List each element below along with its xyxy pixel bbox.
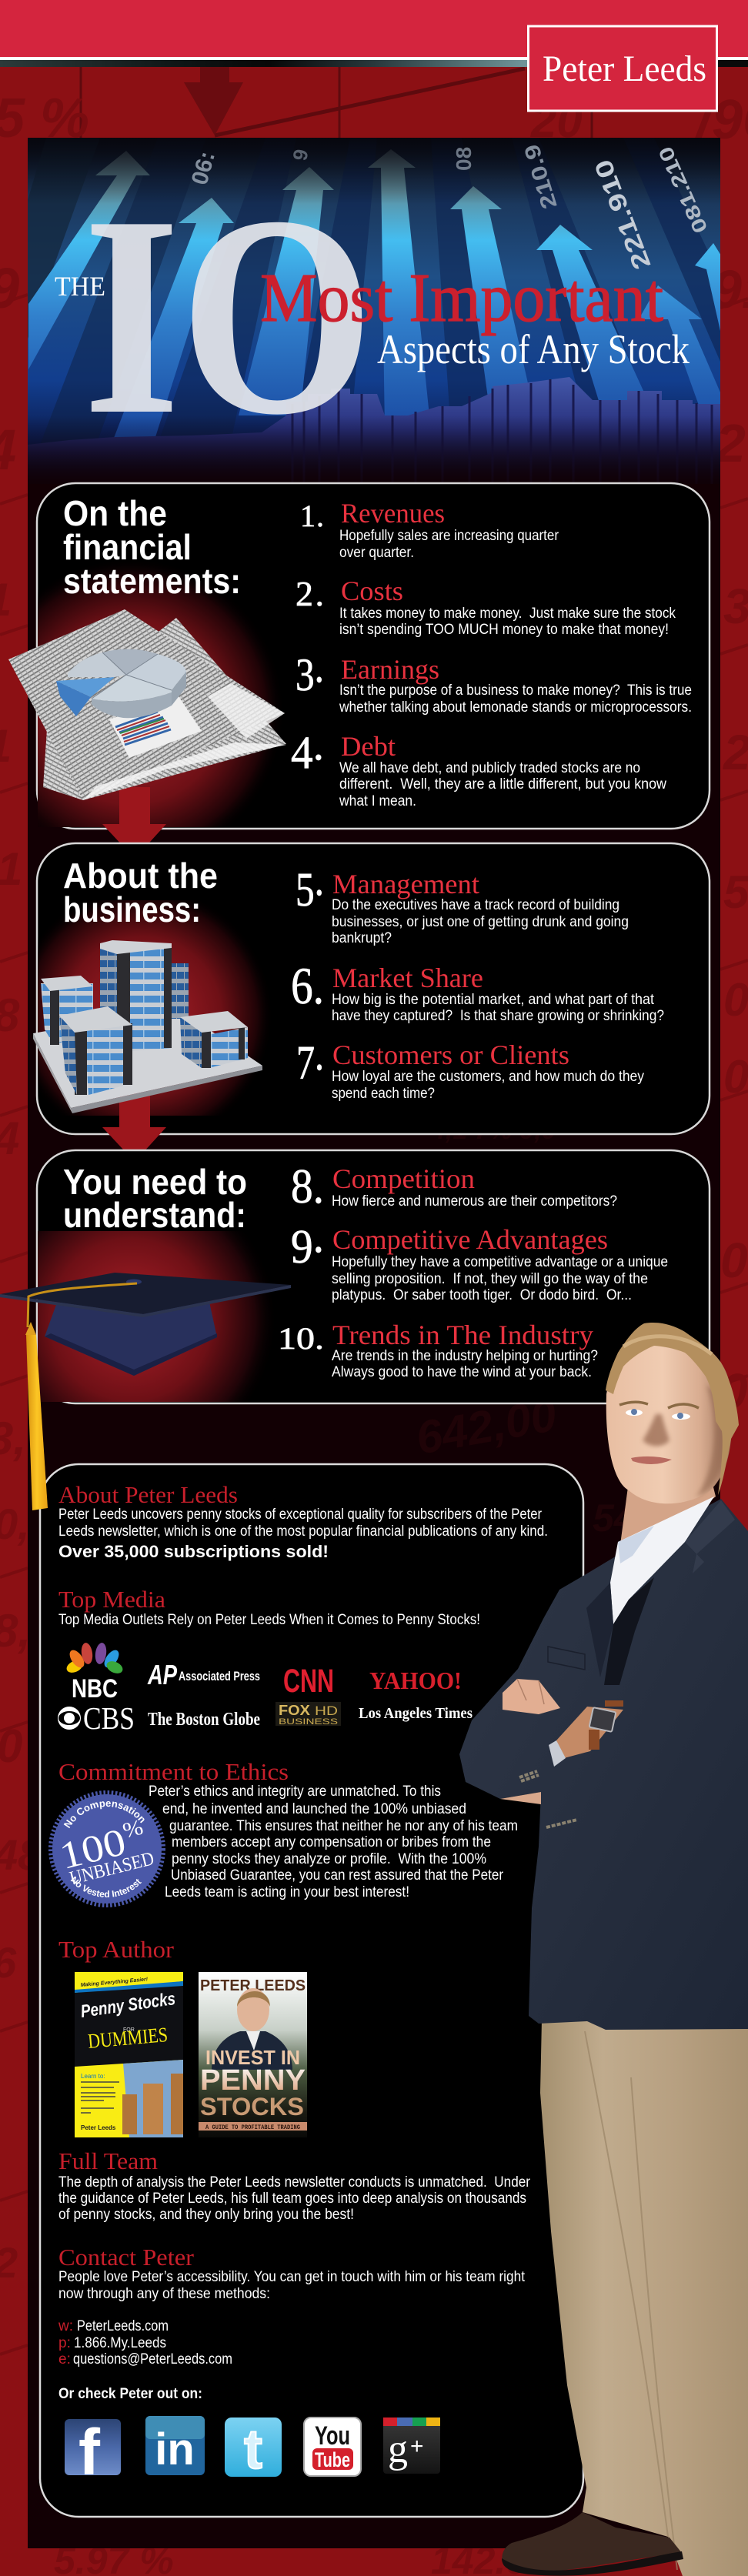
- rear tower: [165, 963, 189, 1019]
- item 7: customers or clients: How loyal are the customers, and how much do they: [332, 1069, 644, 1085]
- logo: Peter Leeds: Peter Leeds: [543, 48, 706, 89]
- section: commitment to ethics: [58, 1758, 518, 1900]
- item 1: revenues: Revenues: [341, 498, 445, 529]
- logo: Yahoo: YAHOO!: [369, 1667, 462, 1694]
- hero rotated figures: 08: [452, 147, 476, 171]
- item 3: earnings: whether talking about lemonade stands or microprocessors.: [339, 699, 692, 716]
- section: contact peter: 1.866.My.Leeds: [74, 2335, 166, 2351]
- watch: [589, 1700, 623, 1750]
- item 1: revenues: Hopefully sales are increasing quarter: [339, 528, 559, 544]
- item 3: earnings: [296, 641, 692, 716]
- logo: CNN: CNN: [283, 1663, 334, 1700]
- icon: youtube: You: [315, 2421, 350, 2451]
- section: commitment to ethics: Commitment to Ethics: [58, 1758, 289, 1785]
- badge: 100% unbiased: No Vested Interest: [71, 1876, 142, 1897]
- logo: Fox HD Business: [275, 1702, 341, 1727]
- item 8: competition: Competition: [332, 1163, 475, 1194]
- section: commitment to ethics: end, he invented and launched the 100% unbiased: [162, 1801, 466, 1817]
- section: about peter leeds: [58, 1481, 548, 1561]
- item 9: competitive advantages: platypus. Or saber tooth tiger. Or dodo bird. Or...: [332, 1287, 632, 1303]
- background pattern: chart numbers: 2: [714, 413, 746, 473]
- badge: 100% unbiased: UNBIASED: [68, 1848, 156, 1889]
- badge: 100% unbiased: %: [120, 1815, 145, 1844]
- logo: CBS: [58, 1700, 135, 1736]
- tall tower: [100, 940, 172, 1052]
- top white rule and dark strip: [0, 57, 748, 67]
- book: penny stocks for dummies: DUMMIES: [87, 2023, 169, 2053]
- shoe: [502, 2512, 683, 2576]
- section: about peter leeds: About Peter Leeds: [58, 1481, 238, 1508]
- social icons: [65, 2416, 440, 2488]
- icon: google plus: [383, 2418, 440, 2474]
- top red band: [0, 0, 748, 57]
- title: The 10 Most Important Aspects of Any Stock: [55, 158, 690, 474]
- item 2: costs: isn’t spending TOO MUCH money to make that money!: [339, 622, 669, 638]
- face: [606, 1335, 732, 1503]
- logo: Los Angeles Times: Los Angeles Times: [359, 1705, 473, 1722]
- badge: 100% unbiased: No Compensation: [63, 1801, 145, 1828]
- tassel: [25, 1283, 137, 1510]
- item 4: debt: what I mean.: [339, 793, 416, 809]
- heading: about the business: About the: [63, 856, 218, 896]
- book: invest in penny stocks: STOCKS: [200, 2093, 304, 2121]
- section: contact peter: questions@PeterLeeds.com: [73, 2351, 232, 2367]
- section: full team: the guidance of Peter Leeds, his full team goes into deep analysis on thousands: [58, 2191, 526, 2207]
- heading: about the business: business:: [63, 889, 201, 929]
- logo: NBC: [65, 1642, 125, 1703]
- section: top author: Top Author: [58, 1936, 175, 1963]
- icon: youtube: [304, 2418, 361, 2476]
- item 8: competition: How fierce and numerous are their competitors?: [332, 1193, 617, 1210]
- eyes: [626, 1409, 690, 1420]
- title line: Aspects of Any Stock: Aspects of Any Stock: [377, 326, 690, 372]
- item 1: revenues: [300, 498, 559, 561]
- book: invest in penny stocks: PENNY: [200, 2064, 306, 2097]
- section: commitment to ethics: penny stocks they analyze or profile. With the 100%: [172, 1851, 486, 1867]
- item 1: revenues: 1.: [300, 499, 324, 533]
- hero bar chart: [28, 377, 720, 454]
- panel glow: [38, 558, 299, 827]
- item 9: competitive advantages: Competitive Advantages: [332, 1224, 608, 1255]
- item 6: market share: 6.: [291, 956, 324, 1015]
- section: commitment to ethics: members accept any compensation or bribes from the: [172, 1834, 491, 1850]
- logo: Fox HD Business: BUSINESS: [279, 1717, 338, 1727]
- book: penny stocks for dummies: Peter Leeds: [81, 2124, 116, 2131]
- item 6: market share: Market Share: [332, 963, 483, 993]
- section: contact peter: Or check Peter out on:: [58, 2386, 202, 2402]
- heading: on the financial statements: [63, 493, 241, 601]
- item 5: management: [296, 853, 629, 946]
- icon: facebook: f: [78, 2416, 101, 2488]
- heading: about the business: [63, 856, 218, 929]
- icon: graduation cap: [0, 1273, 291, 1510]
- hand and forearm: [500, 1679, 623, 1804]
- icon: financial papers and pie chart: [8, 609, 286, 800]
- logo: NBC: NBC: [72, 1674, 118, 1703]
- left building: [41, 976, 93, 1045]
- book: penny stocks for dummies: Penny Stocks: [79, 1988, 176, 2021]
- item 5: management: Do the executives have a track record of building: [332, 897, 619, 913]
- item 2: costs: 2.: [296, 574, 324, 613]
- hero rotated figures: 210.9: [519, 142, 562, 212]
- book: invest in penny stocks: PETER LEEDS: [200, 1977, 306, 1994]
- faint column numbers: 642,00: [412, 1389, 560, 1464]
- item 4: debt: [291, 719, 666, 809]
- section: commitment to ethics: guarantee. This ensures that neither he nor any of his team: [169, 1818, 518, 1834]
- icon: twitter: t: [244, 2419, 262, 2481]
- icon: twitter: [225, 2418, 282, 2481]
- pie chart: [56, 649, 186, 718]
- book: invest in penny stocks: [199, 1972, 307, 2137]
- panel: about the business: [37, 843, 710, 1134]
- item 10: trends in the industry: [278, 1320, 598, 1380]
- logo: Peter Leeds: [528, 26, 717, 111]
- hero rotated figures: [187, 142, 712, 273]
- icon: google plus: +: [410, 2434, 424, 2459]
- heading: on the financial statements: statements:: [63, 561, 241, 601]
- logo: Fox HD Business: HD: [315, 1703, 338, 1718]
- logo: The Boston Globe: The Boston Globe: [148, 1710, 260, 1730]
- section: about peter leeds: Peter Leeds uncovers penny stocks of exceptional quality for subscribers of the Peter: [58, 1507, 543, 1523]
- arrow: panel 2 to panel 3: [102, 1093, 166, 1162]
- item 9: competitive advantages: .: [313, 1210, 324, 1263]
- book: penny stocks for dummies: Learn to:: [81, 2073, 105, 2080]
- faint column numbers: [412, 1116, 646, 1540]
- neck: [618, 1481, 716, 1562]
- section: contact peter: now through any of these methods:: [58, 2286, 270, 2302]
- book: penny stocks for dummies: FOR: [123, 2027, 135, 2033]
- section: about peter leeds: Leeds newsletter, which is one of the most popular financial publications of any kind.: [58, 1523, 548, 1540]
- item 9: competitive advantages: selling proposition. If not, they will go the way of the: [332, 1271, 648, 1287]
- jacket: [459, 1499, 748, 2030]
- heading: you need to understand: [63, 1162, 247, 1235]
- heading: on the financial statements: financial: [63, 527, 192, 567]
- item 7: customers or clients: Customers or Clients: [332, 1039, 569, 1070]
- item 4: debt: We all have debt, and publicly traded stocks are no: [339, 760, 640, 776]
- hero rotated figures: 9: [288, 148, 312, 162]
- arrow: panel 1 to panel 2: [102, 787, 166, 859]
- panel: about peter leeds and credentials: [38, 1463, 585, 2518]
- section: about peter leeds: Over 35,000 subscriptions sold!: [58, 1542, 329, 1561]
- background pattern: chart numbers: 0: [720, 1363, 748, 1419]
- section: full team: Full Team: [58, 2147, 158, 2174]
- section: full team: The depth of analysis the Peter Leeds newsletter conducts is unmatched. Under: [58, 2174, 531, 2191]
- heading: on the financial statements: On the: [63, 493, 167, 533]
- section: top media: Top Media: [58, 1586, 165, 1613]
- item 7: customers or clients: spend each time?: [332, 1086, 435, 1102]
- background pattern: chart numbers: 0: [720, 1233, 748, 1288]
- section: contact peter: PeterLeeds.com: [77, 2318, 169, 2334]
- item 10: trends in the industry: Trends in The Industry: [332, 1320, 593, 1350]
- item 6: market share: How big is the potential market, and what part of that: [332, 992, 655, 1008]
- item 7: customers or clients: 7: [296, 1037, 320, 1089]
- badge: 100% unbiased: [48, 1790, 165, 1907]
- item 8: competition: 8.: [291, 1159, 324, 1213]
- eyebrows: [619, 1402, 699, 1408]
- section: contact peter: Contact Peter: [58, 2244, 195, 2271]
- logo: CBS: CBS: [83, 1700, 135, 1736]
- item 4: debt: 4: [291, 727, 314, 778]
- item 10: trends in the industry: Are trends in the industry helping or hurting?: [332, 1348, 598, 1364]
- item 8: competition: [291, 1159, 617, 1213]
- section: contact peter: People love Peter’s accessibility. You can get in touch with him or his team right: [58, 2269, 526, 2285]
- book: invest in penny stocks: A GUIDE TO PROFITABLE TRADING: [205, 2124, 300, 2131]
- item 7: customers or clients: .: [315, 1028, 324, 1080]
- item 10: trends in the industry: Always good to have the wind at your back.: [332, 1364, 592, 1380]
- item 3: earnings: Earnings: [341, 654, 439, 685]
- item 6: market share: have they captured? Is that share growing or shrinking?: [332, 1008, 664, 1024]
- item 5: management: .: [315, 853, 324, 906]
- section: commitment to ethics: Leeds team is acting in your best interest!: [165, 1884, 409, 1900]
- icon: linkedin: [145, 2416, 205, 2475]
- hero top shadow: [28, 138, 720, 204]
- right building: [180, 1011, 248, 1068]
- photo: Peter Leeds standing: [459, 1323, 748, 2576]
- item 9: competitive advantages: Hopefully they have a competitive advantage or a unique: [332, 1254, 668, 1270]
- item 9: competitive advantages: [291, 1210, 668, 1303]
- item 4: debt: .: [313, 719, 324, 769]
- icon: google plus: g: [388, 2428, 408, 2471]
- title line: Most Important: Most Important: [260, 260, 663, 336]
- book: penny stocks for dummies: Making Everything Easier!: [81, 1977, 149, 1988]
- item 3: earnings: 3: [296, 649, 319, 700]
- section: contact peter: w:: [58, 2318, 73, 2334]
- media logos: [58, 1642, 473, 1736]
- section: commitment to ethics: Peter’s ethics and integrity are unmatched. To this: [149, 1784, 441, 1800]
- section: contact peter: [58, 2244, 526, 2402]
- icon: youtube: Tube: [315, 2448, 350, 2471]
- section: contact peter: e:: [58, 2351, 71, 2367]
- trousers: [540, 2020, 748, 2576]
- shirt front: [610, 1497, 714, 1624]
- icon: facebook: [65, 2416, 121, 2488]
- heading: you need to understand: understand:: [63, 1195, 246, 1235]
- icon: office buildings: [33, 940, 262, 1113]
- item 3: earnings: .: [315, 641, 324, 692]
- item 3: earnings: Isn’t the purpose of a business to make money? This is true: [339, 682, 692, 699]
- book: invest in penny stocks: INVEST IN: [205, 2046, 300, 2069]
- item 6: market share: [291, 956, 664, 1024]
- icon: linkedin: in: [155, 2424, 195, 2474]
- item 2: costs: It takes money to make money. Just make sure the stock: [339, 606, 676, 622]
- item 5: management: Management: [332, 869, 479, 899]
- section: full team: [58, 2147, 531, 2223]
- section: full team: of penny stocks, and they only bring you the best!: [58, 2207, 354, 2223]
- logo: Associated Press: [147, 1659, 260, 1690]
- hero arrows: [28, 149, 727, 454]
- faint column numbers: 54.: [593, 1497, 646, 1540]
- item 2: costs: Costs: [341, 576, 403, 606]
- section: contact peter: p:: [58, 2335, 71, 2351]
- item 10: trends in the industry: 10.: [278, 1321, 324, 1356]
- logo: Fox HD Business: FOX: [279, 1703, 310, 1718]
- title word: THE: THE: [55, 271, 105, 302]
- hair: [606, 1323, 739, 1495]
- hero rotated figures: 081.210: [653, 143, 712, 237]
- badge: 100% unbiased: 100: [55, 1820, 130, 1877]
- book: penny stocks for dummies: [75, 1972, 183, 2137]
- lapel shadows: [604, 1577, 654, 1685]
- logo: Associated Press: AP: [147, 1659, 178, 1690]
- title number: 10: IO: [83, 158, 374, 474]
- item 2: costs: [296, 574, 676, 638]
- background pattern: chart numbers: 20: [530, 95, 583, 147]
- section: commitment to ethics: Unbiased Guarantee, you can rest assured that the Peter: [171, 1867, 504, 1884]
- hero background stripes: [28, 177, 720, 436]
- panel glow: [38, 1231, 299, 1402]
- logo: Associated Press: Associated Press: [179, 1669, 260, 1683]
- section: top media: [58, 1586, 480, 1628]
- item 7: customers or clients: [296, 1028, 644, 1102]
- section: top media: Top Media Outlets Rely on Peter Leeds When it Comes to Penny Stocks!: [58, 1612, 480, 1628]
- hero rotated figures: 221.910: [589, 155, 656, 273]
- panel: you need to understand: [37, 1150, 710, 1403]
- item 4: debt: Debt: [341, 731, 396, 762]
- panel glow: [38, 900, 284, 1116]
- item 9: competitive advantages: 9: [291, 1221, 315, 1273]
- item 5: management: 5: [296, 864, 319, 916]
- panel: on the financial statements: [37, 483, 710, 829]
- face shading: [696, 1385, 730, 1497]
- item 5: management: bankrupt?: [332, 930, 392, 946]
- faint column numbers: 4,1 7% 9,0: [430, 1116, 556, 1145]
- item 4: debt: different. Well, they are a little different, but you know: [339, 776, 666, 792]
- mouth: [631, 1457, 672, 1464]
- sleeve buttons: [519, 1771, 577, 1827]
- item 5: management: businesses, or just one of getting drunk and going: [332, 914, 629, 930]
- heading: you need to understand: You need to: [63, 1162, 247, 1202]
- nose: [643, 1414, 670, 1446]
- hero image: [28, 138, 727, 489]
- front building: [59, 1006, 132, 1095]
- hero rotated figures: 06:: [187, 148, 220, 188]
- item 1: revenues: over quarter.: [339, 545, 414, 561]
